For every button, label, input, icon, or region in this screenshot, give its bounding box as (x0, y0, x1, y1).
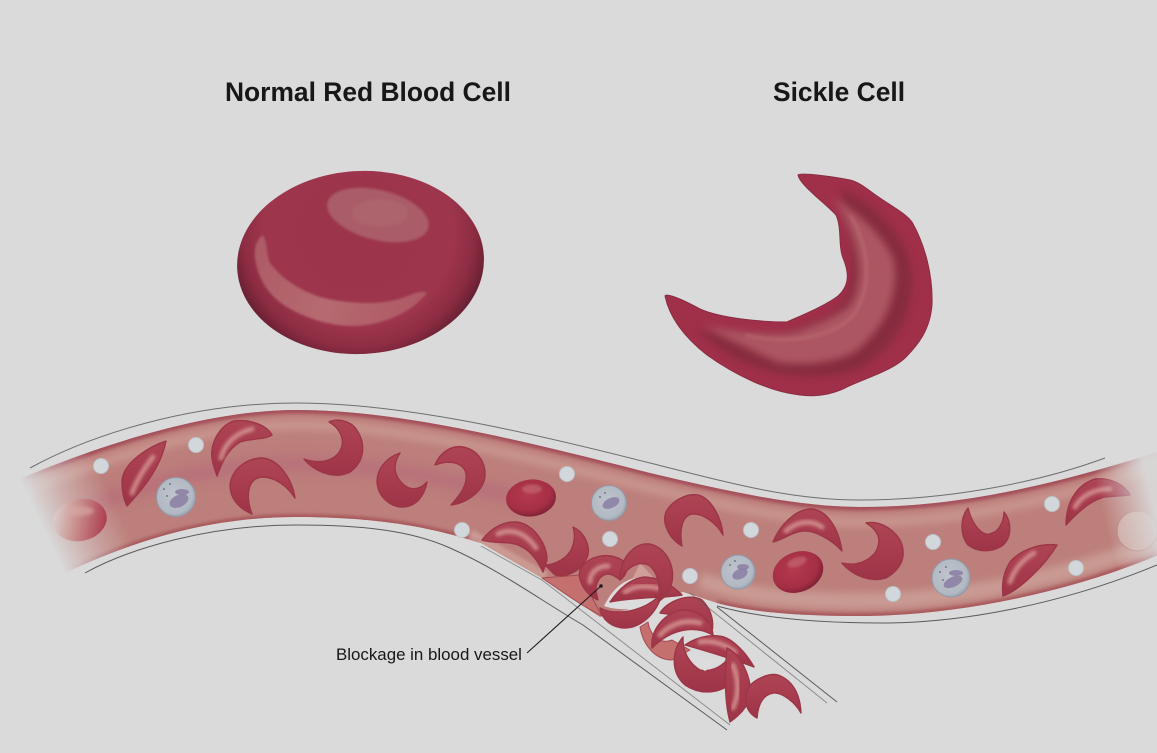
dark band around highlight (698, 188, 912, 376)
illustration: sickle cell (665, 174, 932, 396)
callout label: Blockage in blood vessel (336, 645, 522, 664)
sickle cells in vessel, left (122, 420, 485, 514)
vessel outer lines (30, 403, 1157, 730)
heading: sickle cell: Sickle Cell (773, 77, 905, 107)
sickle cell blockage cluster (482, 522, 801, 722)
faded red blood cell, right (1118, 512, 1152, 552)
light band (702, 197, 895, 364)
heading: normal red blood cell: Normal Red Blood Cell (225, 77, 511, 107)
white blood cell 1 (156, 478, 196, 516)
white blood cell 2 (592, 486, 626, 520)
vessel wall body (24, 410, 1157, 617)
blood vessel with cells (24, 410, 1157, 723)
white blood cell 3 (721, 555, 755, 589)
sickle cells in vessel, right (665, 479, 1130, 596)
faded red blood cell, left (49, 494, 111, 546)
platelets (94, 438, 1084, 602)
white blood cell 4 (932, 559, 970, 597)
illustration: normal red blood cell (232, 165, 489, 360)
red blood cell small 2 (772, 551, 824, 593)
leader line to blockage (527, 584, 603, 653)
red blood cell small 1 (506, 479, 556, 517)
